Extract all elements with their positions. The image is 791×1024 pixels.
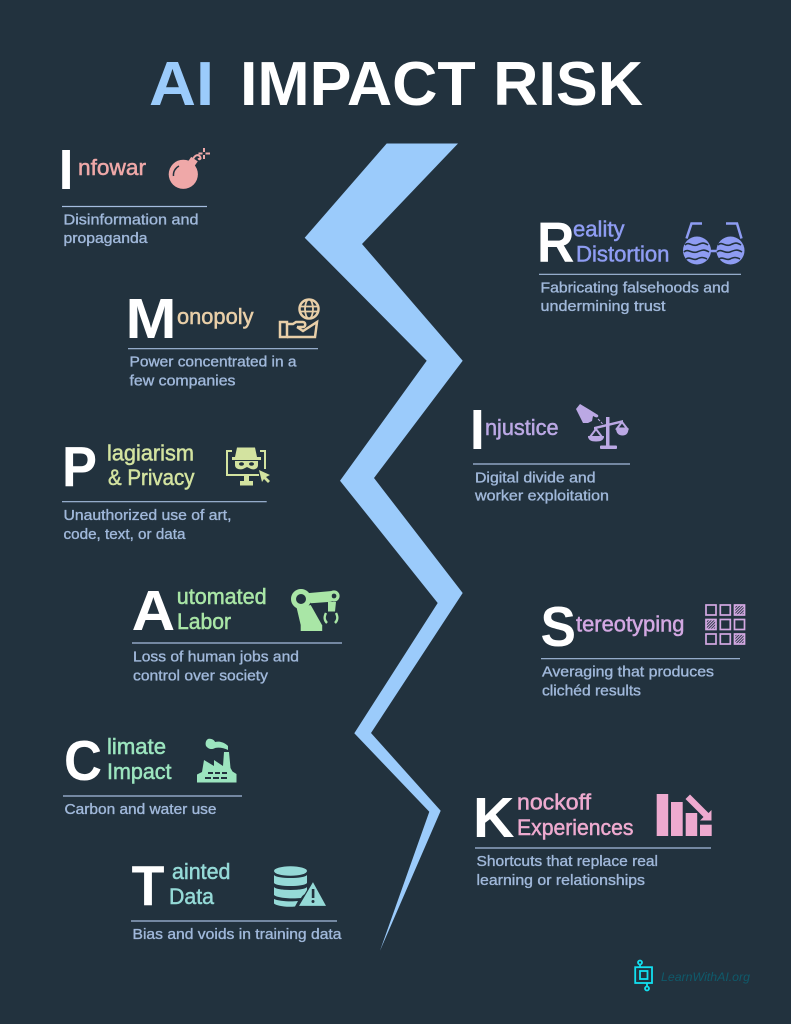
logo: LearnWithAI.org: LearnWithAI.org [661, 970, 750, 984]
description: plagiarism and privacy: Unauthorized use of art, [64, 508, 232, 524]
panel: stereotyping [540, 595, 744, 699]
heading: stereotyping: tereotyping [576, 612, 684, 637]
description: plagiarism and privacy [64, 508, 232, 543]
description: injustice [474, 470, 609, 505]
heading: tainted data [132, 854, 230, 918]
icon: tipped scales [576, 404, 628, 449]
heading: stereotyping [540, 595, 684, 659]
description: knockoff experiences [476, 854, 658, 889]
heading: injustice: njustice [485, 415, 558, 440]
heading: climate impact: limate [107, 734, 166, 759]
panel: plagiarism and privacy [62, 435, 270, 543]
description: injustice: Digital divide and [475, 470, 596, 486]
heading: infowar [59, 138, 146, 202]
icon: robot arm [294, 591, 338, 631]
heading: tainted data: ainted [172, 859, 230, 884]
heading: knockoff experiences: K [473, 786, 514, 850]
panel: climate impact [63, 729, 242, 818]
heading: infowar: nfowar [78, 155, 146, 180]
description: automated labor: control over society [133, 669, 269, 685]
description: stereotyping: clichéd results [542, 683, 641, 699]
panel: reality distortion [537, 211, 744, 315]
description: knockoff experiences: learning or relationships [476, 873, 645, 889]
description: plagiarism and privacy: code, text, or data [64, 527, 186, 543]
heading: plagiarism and privacy: lagiarism [107, 441, 194, 466]
title: AI [149, 50, 214, 119]
heading: plagiarism and privacy: & Privacy [108, 465, 194, 490]
heading: automated labor [132, 579, 267, 643]
description: reality distortion: Fabricating falsehoods and [540, 280, 730, 296]
heading: knockoff experiences [473, 786, 634, 850]
description: monopoly [130, 355, 297, 390]
icon: database warning [274, 866, 327, 907]
icon: declining bars [657, 794, 712, 836]
lightning bolt divider [305, 144, 463, 951]
heading: monopoly: M [126, 287, 176, 351]
heading: reality distortion: R [537, 211, 574, 275]
description: stereotyping [542, 665, 714, 699]
heading: monopoly [126, 287, 254, 351]
description: knockoff experiences: Shortcuts that replace real [476, 854, 658, 870]
description: automated labor [133, 650, 299, 685]
logo: LearnWithAI.org [635, 960, 750, 990]
icon: logo mark [635, 960, 652, 990]
icon: factory [197, 739, 236, 782]
panel: monopoly [126, 287, 318, 390]
heading: injustice [470, 398, 558, 462]
heading: injustice: I [470, 398, 485, 462]
description: stereotyping: Averaging that produces [542, 665, 714, 681]
icon: masked figure on monitor [227, 448, 270, 486]
panel: automated labor [132, 579, 342, 685]
description: reality distortion [540, 280, 730, 315]
heading: reality distortion [537, 211, 670, 275]
icon: hand holding globe [280, 300, 318, 337]
description: reality distortion: undermining trust [540, 299, 666, 315]
heading: plagiarism and privacy: P [62, 435, 97, 499]
description: infowar [64, 212, 198, 247]
heading: infowar: I [59, 138, 74, 202]
description: tainted data: Bias and voids in training data [132, 927, 342, 943]
description: infowar: Disinformation and [64, 212, 198, 228]
heading: automated labor: Labor [177, 609, 231, 634]
icon: grid of squares [706, 605, 744, 644]
heading: stereotyping: S [540, 595, 576, 659]
heading: climate impact: C [64, 729, 102, 793]
heading: knockoff experiences: nockoff [517, 789, 592, 814]
heading: climate impact [64, 729, 172, 793]
heading: automated labor: A [132, 579, 175, 643]
description: automated labor: Loss of human jobs and [133, 650, 299, 666]
panel: tainted data [131, 854, 342, 943]
heading: tainted data: T [132, 854, 165, 918]
heading: reality distortion: Distortion [576, 242, 670, 267]
heading: monopoly: onopoly [177, 304, 254, 329]
heading: reality distortion: eality [573, 217, 624, 242]
description: monopoly: Power concentrated in a [130, 355, 297, 371]
heading: knockoff experiences: Experiences [517, 815, 634, 840]
description: monopoly: few companies [130, 374, 236, 390]
heading: tainted data: Data [169, 884, 215, 909]
heading: automated labor: utomated [177, 584, 267, 609]
icon: bomb [169, 148, 210, 189]
heading: plagiarism and privacy [62, 435, 194, 499]
title: IMPACT RISK [240, 50, 643, 119]
description: climate impact: Carbon and water use [64, 802, 216, 818]
description: infowar: propaganda [64, 231, 148, 247]
description: injustice: worker exploitation [474, 489, 609, 505]
heading: climate impact: Impact [107, 759, 172, 784]
icon: distorted glasses [683, 224, 744, 264]
panel: injustice [470, 398, 630, 505]
panel: infowar [59, 138, 210, 247]
panel: knockoff experiences [473, 786, 712, 889]
